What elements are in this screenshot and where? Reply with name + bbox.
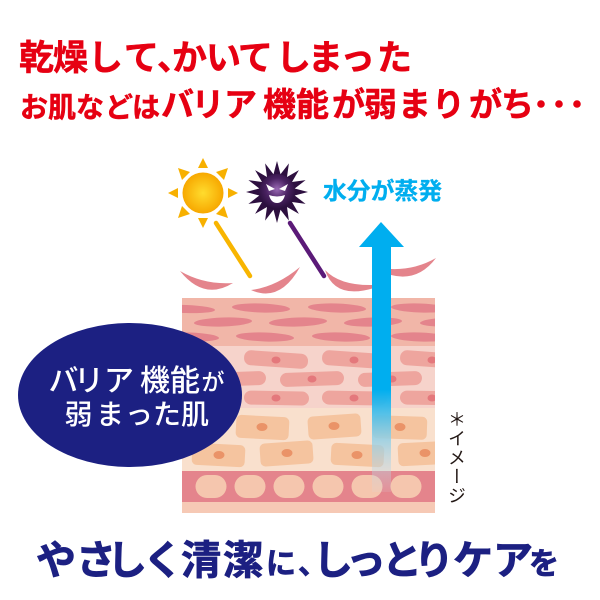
title: dry skin headline: バリア機能が弱まりがち (161, 86, 534, 123)
label: water evaporates: 水分が蒸発 (323, 177, 443, 204)
basal layer cells (191, 413, 453, 467)
arrow: moisture rising (359, 222, 404, 492)
spinous layer cells (236, 350, 435, 406)
icon: sun (168, 158, 238, 228)
tagline: を (529, 548, 559, 581)
title: dry skin headline: お肌などは (20, 92, 160, 123)
title: dry skin headline: 乾燥して、かいてしまった (19, 39, 412, 78)
dermis cells (196, 475, 422, 498)
tagline: やさしく清潔 (36, 539, 263, 583)
spinous layer nuclei (272, 356, 436, 402)
title: dry skin headline (19, 39, 581, 123)
note: image only: ＊イメージ (446, 410, 466, 504)
badge: weakened barrier skin: が (202, 369, 224, 395)
icon: germ (246, 161, 308, 223)
badge: weakened barrier skin: バリア機能 (48, 365, 200, 398)
stratum corneum cells (182, 303, 435, 342)
arrow: sun rays (216, 223, 250, 276)
tagline: に、 (266, 548, 328, 581)
tagline (36, 539, 559, 583)
tagline: しっとりケア (313, 539, 533, 583)
basal layer nuclei (214, 422, 430, 459)
badge: weakened barrier skin: 弱まった肌 (64, 399, 209, 430)
badge: weakened barrier skin (18, 323, 242, 467)
skin cross-section (182, 298, 435, 513)
arrow: germ attack (290, 223, 324, 276)
skin flakes (180, 258, 436, 293)
